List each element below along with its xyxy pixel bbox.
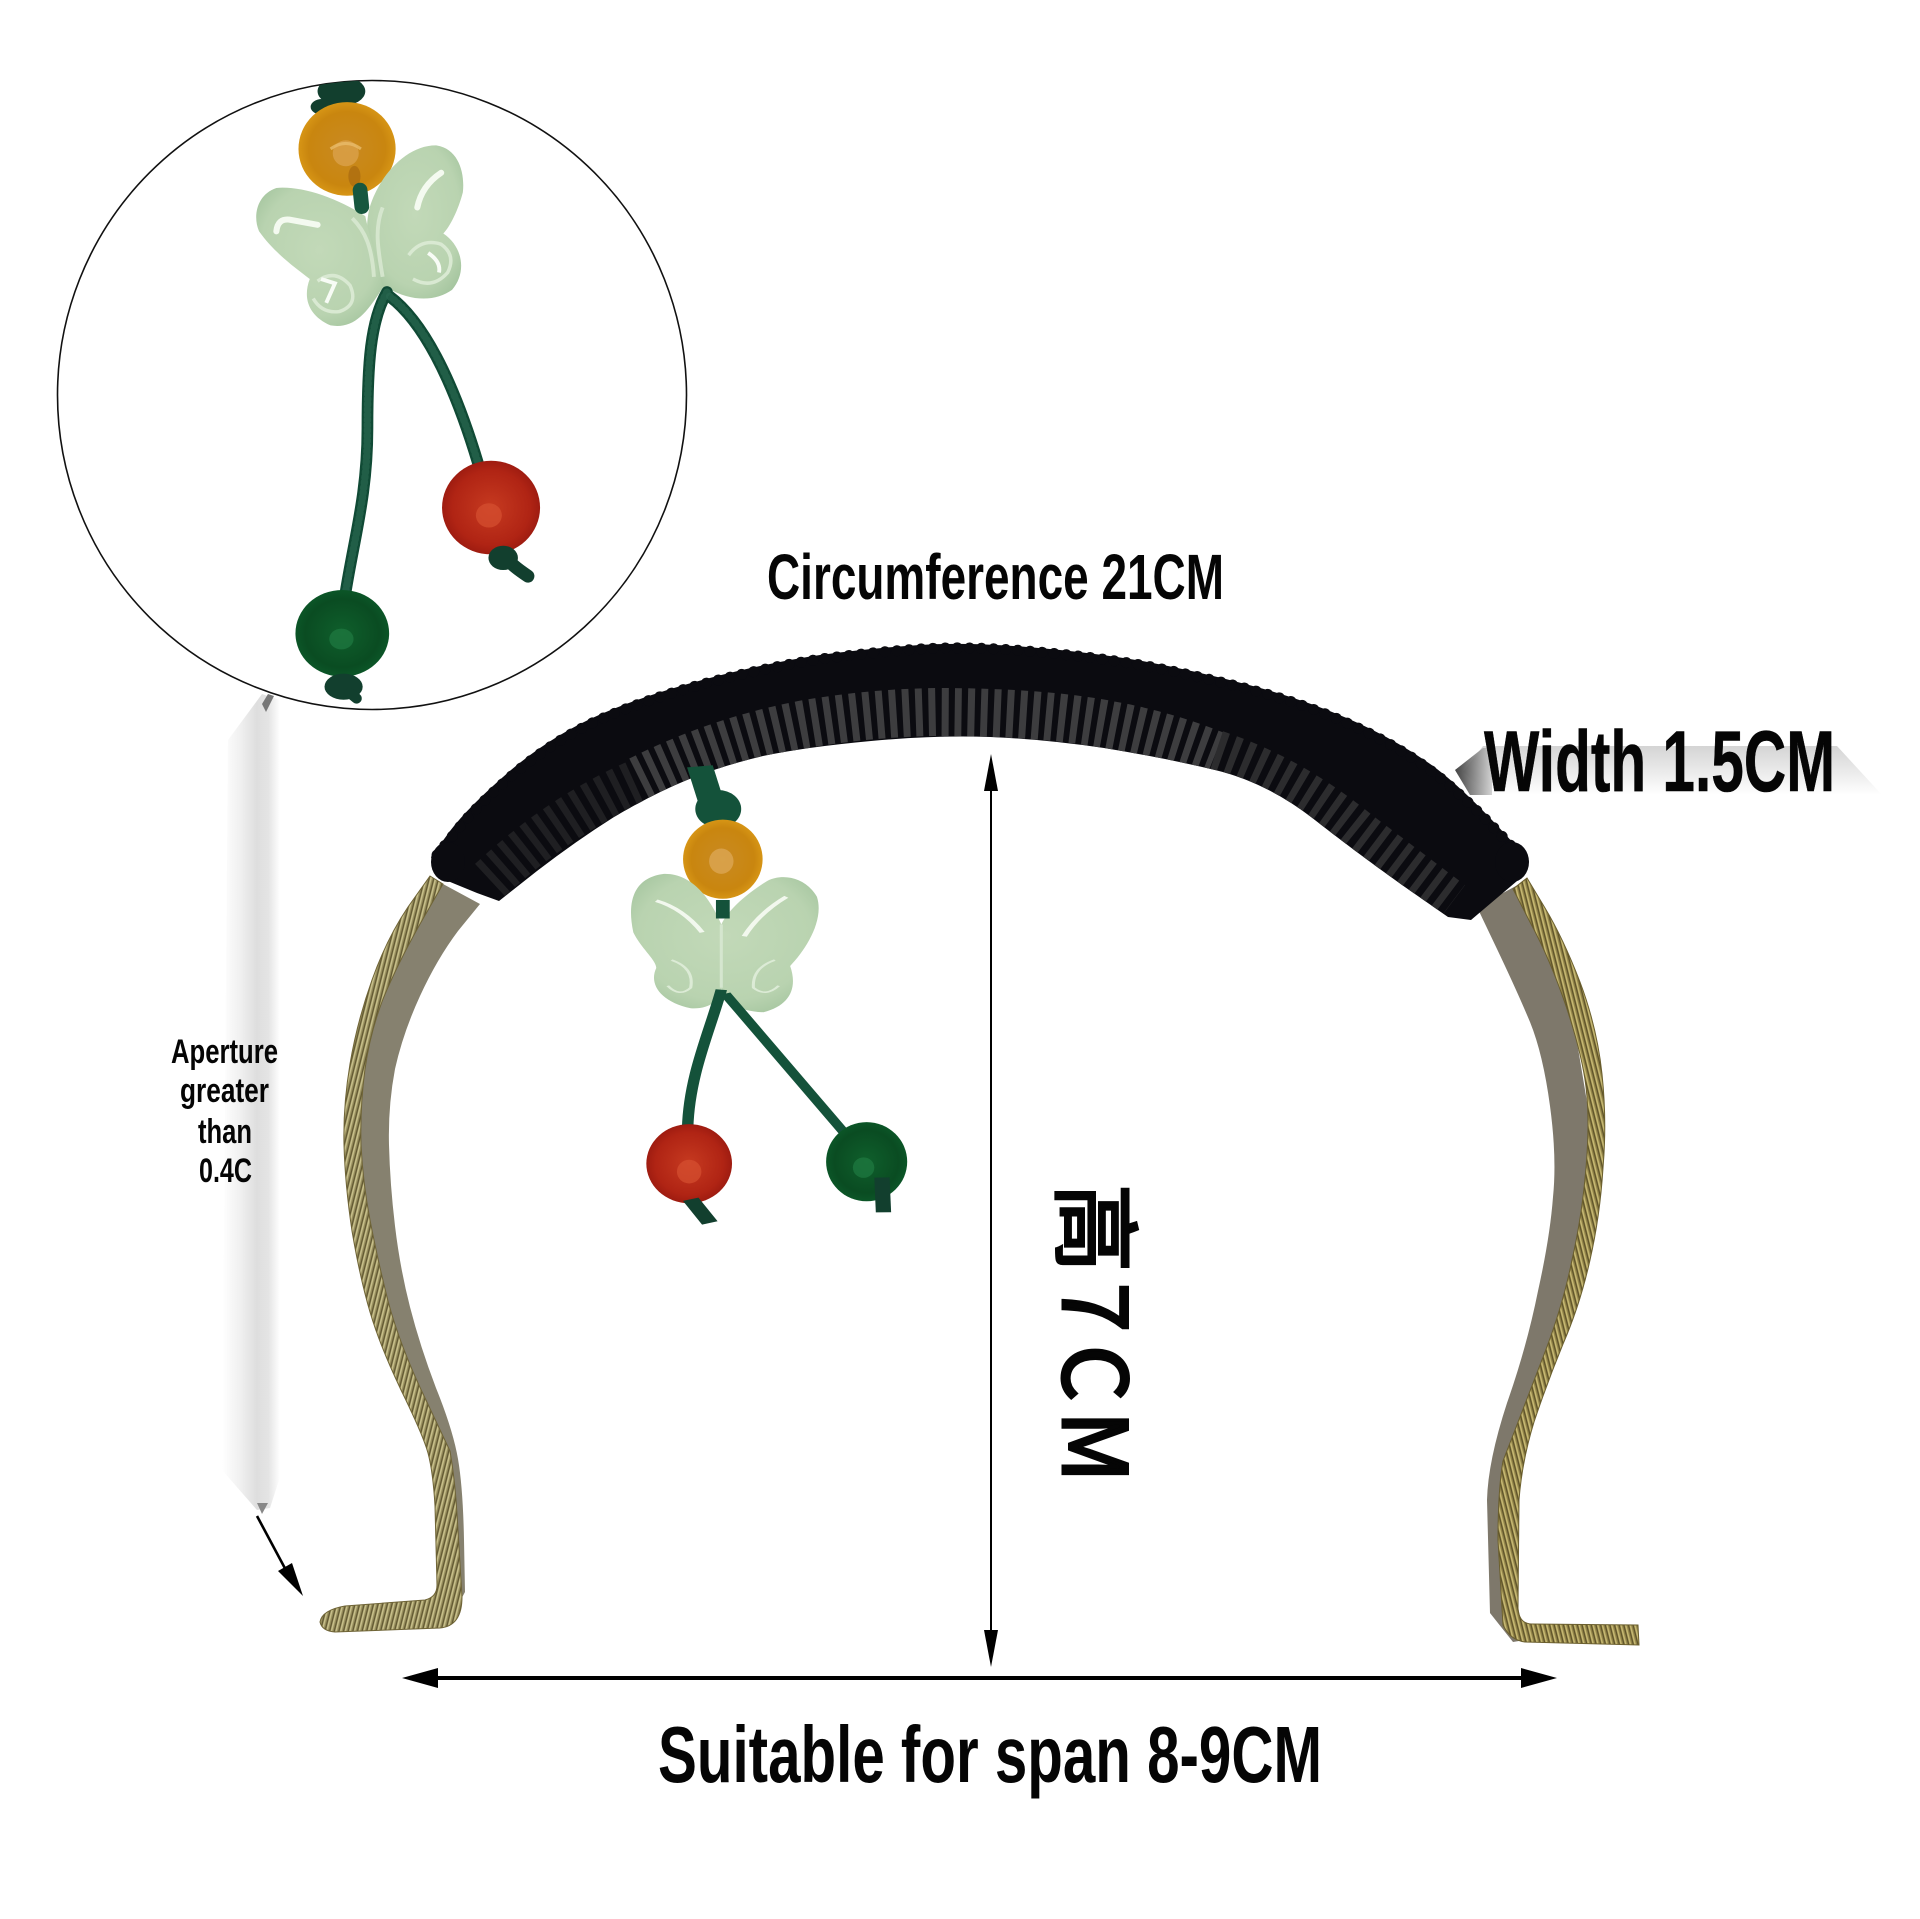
label: span: Suitable for span 8-9CM	[658, 1710, 1322, 1799]
left arm gold strip	[320, 876, 462, 1632]
label: aperture: Aperture	[171, 1033, 278, 1071]
inset circle: charm close-up	[58, 76, 686, 710]
scalloped outer edge	[437, 648, 1523, 859]
butterfly	[631, 874, 819, 1012]
small aperture arrow	[257, 1516, 303, 1596]
blurred grey shadow strip on the left	[222, 694, 280, 1514]
red bead	[646, 1124, 732, 1223]
amber bead	[683, 820, 763, 899]
label: height, rotated: 高7CM	[1037, 1184, 1164, 1482]
inset cords	[346, 190, 478, 591]
right arm gold strip	[1498, 878, 1639, 1645]
label: aperture: greater	[180, 1072, 269, 1110]
cords	[688, 990, 844, 1132]
handle frame: left metal arm	[320, 876, 480, 1632]
right end lump	[1495, 842, 1529, 882]
vertical height arrow	[984, 754, 998, 1667]
inset charm	[256, 76, 540, 700]
handle frame: right metal arm	[1477, 878, 1639, 1645]
green bead	[826, 1122, 907, 1212]
left arm grey inner face	[352, 884, 480, 1620]
cord and knot	[695, 766, 741, 828]
inset top knot	[310, 80, 366, 114]
hanging charm on band	[631, 766, 907, 1223]
label: aperture: 0.4C	[199, 1152, 252, 1190]
right arm grey inner face	[1477, 880, 1595, 1642]
label: aperture: than	[198, 1113, 252, 1151]
label: aperture	[171, 1033, 278, 1190]
label: circumference: Circumference 21CM	[767, 541, 1224, 613]
inset green bead	[295, 590, 389, 700]
inset red bead	[442, 461, 540, 576]
grey shadow behind width label	[1455, 746, 1882, 795]
inset butterfly	[256, 145, 463, 326]
lower ribbed band section	[490, 712, 1450, 905]
horizontal span arrow	[402, 1668, 1557, 1688]
wrapped black cord band	[431, 644, 1529, 920]
left end lump	[431, 842, 465, 882]
inset amber bead	[298, 102, 396, 196]
